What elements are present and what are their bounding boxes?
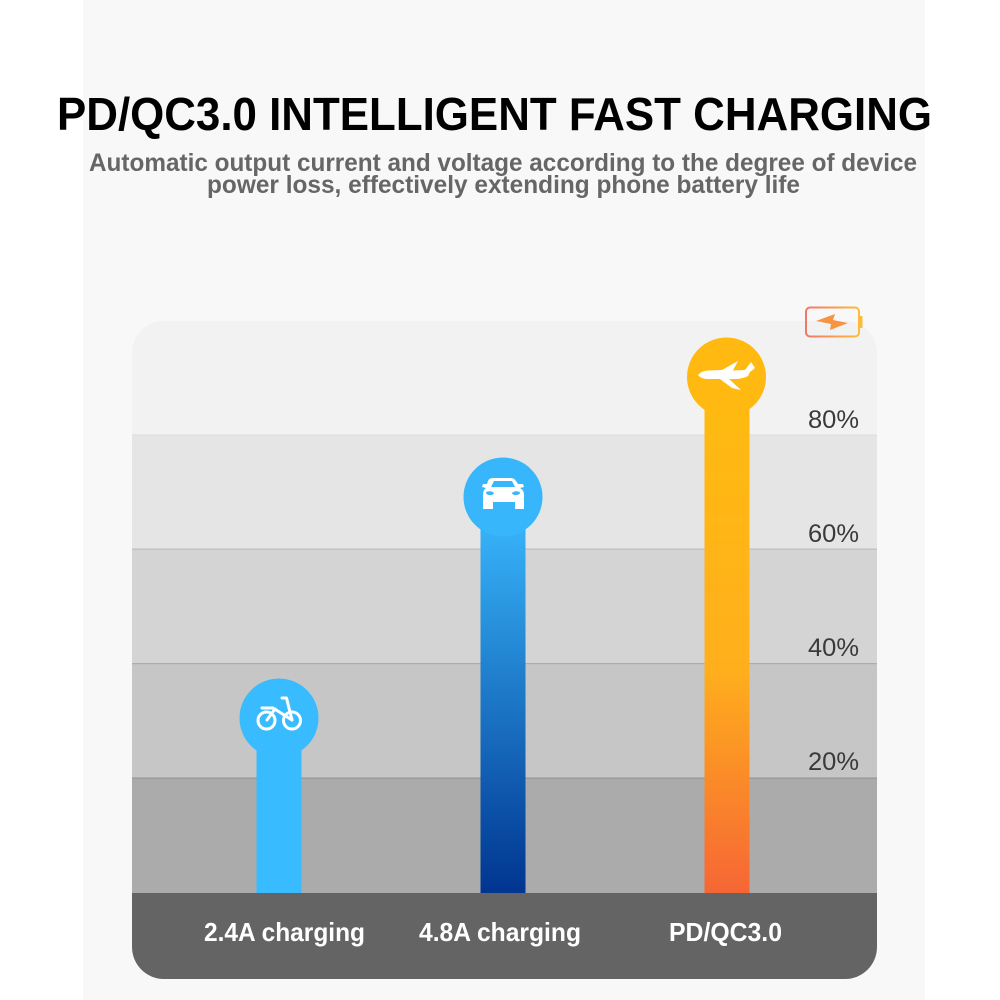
subtitle: Automatic output current and voltage according to the degree of device (89, 149, 917, 177)
icon: airplane (698, 361, 755, 390)
icon: bicycle (258, 698, 300, 729)
bottom labels: PD/QC3.0 (669, 917, 782, 947)
icon: battery (806, 308, 862, 336)
bottom labels: 4.8A charging (419, 917, 581, 947)
bar: 4.8A charging (464, 458, 542, 893)
bottom labels: 2.4A charging (204, 917, 365, 947)
axis label: 80%: 80% (808, 406, 859, 434)
subtitle (89, 149, 917, 199)
icon: car (482, 478, 524, 509)
bar: PD/QC3.0 (687, 338, 766, 893)
axis label: 20%: 20% (808, 748, 859, 776)
axis label: 40%: 40% (808, 634, 859, 662)
bottom labels (204, 917, 782, 947)
subtitle: power loss, effectively extending phone battery life (207, 171, 800, 199)
axis label: 60%: 60% (808, 520, 859, 548)
panel: chart background bands (132, 434, 877, 979)
bar: 2.4A charging (240, 678, 318, 893)
title: PD/QC3.0 INTELLIGENT FAST CHARGING (57, 88, 932, 140)
